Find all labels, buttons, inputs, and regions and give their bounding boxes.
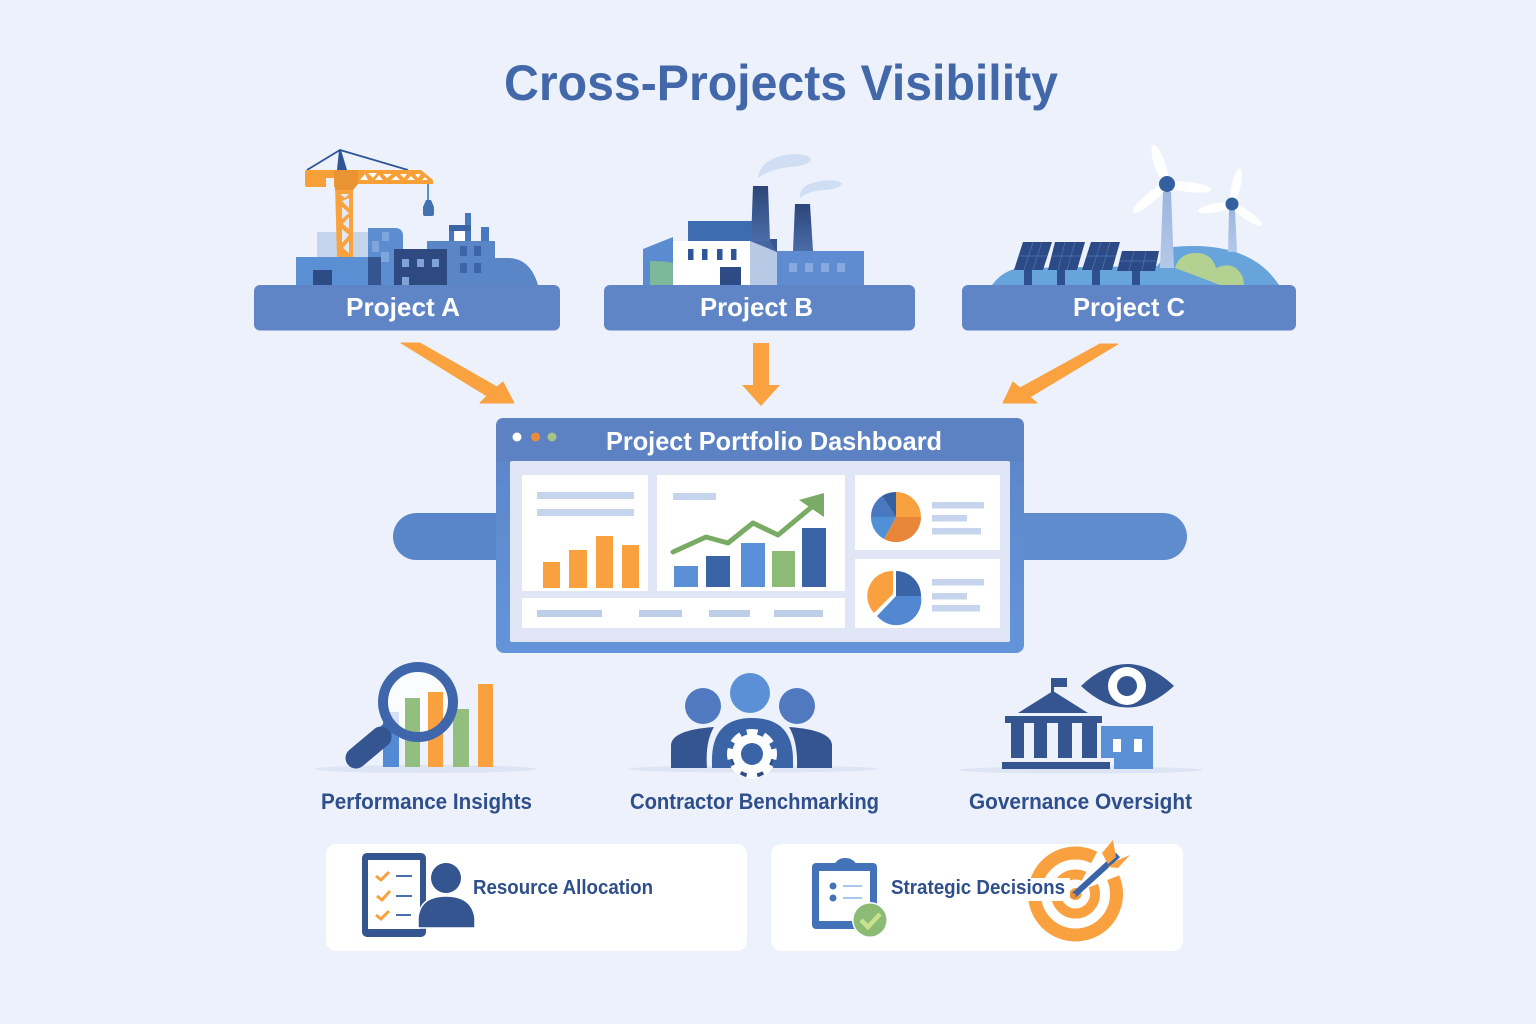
chart: orange bar chart — [522, 475, 648, 591]
illustration: solar panels and wind turbines — [992, 143, 1279, 285]
illustration: factory with smokestacks — [643, 154, 864, 285]
chart: bars with green trend arrow — [657, 475, 845, 591]
card: strategic decisions — [771, 840, 1183, 951]
icon: wind turbine small — [1197, 167, 1264, 252]
panel: project C — [962, 143, 1296, 330]
panel: project portfolio dashboard — [496, 418, 1024, 653]
icon: solar panels — [1014, 242, 1159, 285]
icon: target with arrow — [1020, 840, 1135, 935]
chart: table row — [522, 598, 845, 628]
arrow: Project A to dashboard — [401, 343, 514, 403]
chart: pie two with legend — [855, 559, 1000, 628]
card: resource allocation — [326, 844, 747, 951]
connector bar: left — [393, 513, 523, 560]
label: Governance Oversight — [969, 789, 1193, 814]
label bar: Project B: Project B — [700, 292, 813, 322]
benefit: contractor benchmarking — [628, 673, 879, 814]
chart: pie one with legend — [855, 475, 1000, 550]
window control dots — [512, 432, 556, 442]
arrow: Project B to dashboard — [742, 343, 780, 406]
connector bar: right — [1000, 513, 1187, 560]
title: Cross-Projects Visibility — [504, 55, 1058, 111]
label: Resource Allocation — [473, 877, 653, 899]
icon: wind turbine large — [1130, 143, 1212, 268]
label bar: Project C — [962, 285, 1296, 330]
icon: gear — [730, 732, 774, 778]
dashboard heading: Project Portfolio Dashboard — [606, 426, 942, 456]
label bar: Project B — [604, 285, 915, 330]
benefit: performance insights — [315, 667, 537, 814]
arrow: Project C to dashboard — [1003, 344, 1118, 403]
label bar: Project A — [254, 285, 560, 330]
icon: magnifier over bar chart — [315, 667, 537, 773]
label: Strategic Decisions — [891, 877, 1065, 899]
icon: government building with eye — [959, 664, 1203, 774]
label bar: Project A: Project A — [346, 292, 460, 322]
panel: project A — [254, 150, 560, 330]
benefit: governance oversight — [959, 664, 1203, 814]
label bar: Project C: Project C — [1073, 292, 1185, 322]
icon: clipboard with check — [812, 858, 888, 938]
icon: team with gear — [628, 673, 878, 778]
label: Contractor Benchmarking — [630, 789, 879, 814]
crane — [305, 150, 434, 257]
panel: project B — [604, 154, 915, 330]
label: Performance Insights — [321, 789, 532, 814]
icon: checklist and person — [362, 853, 475, 937]
illustration: construction site with crane — [296, 150, 538, 285]
